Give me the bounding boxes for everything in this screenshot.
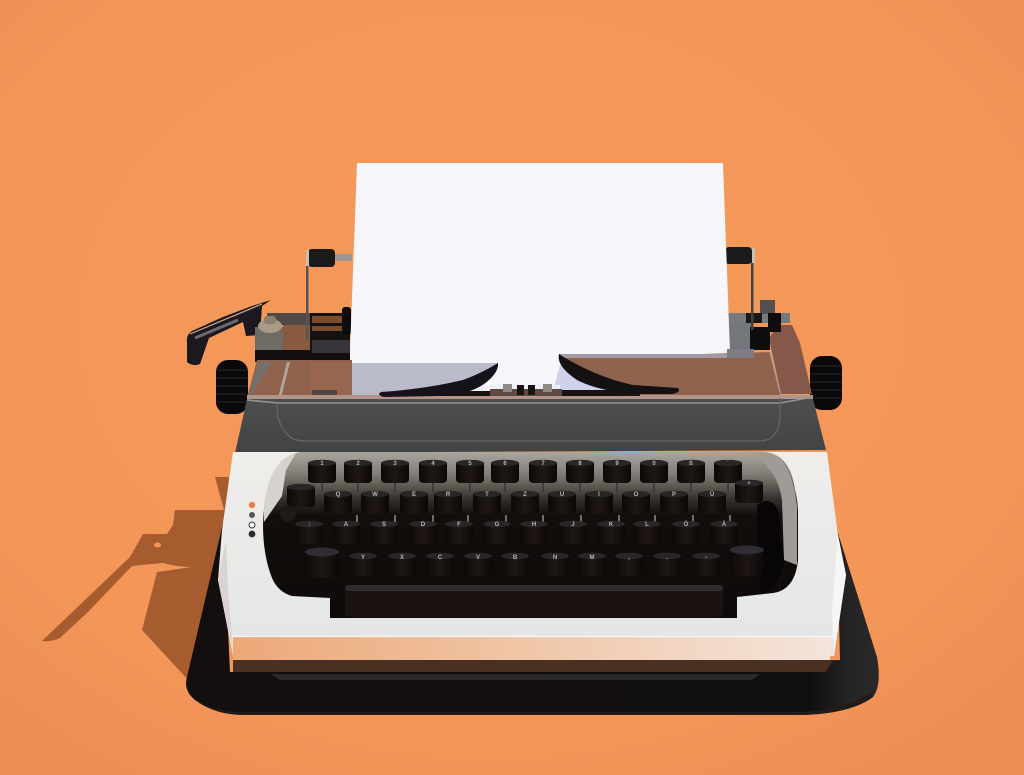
left bevel <box>218 540 233 650</box>
desk mat <box>186 523 879 715</box>
keyboard well <box>263 452 798 618</box>
keys row 3: Ö <box>684 521 689 528</box>
grey body band <box>235 397 826 453</box>
mat lower edge <box>195 692 873 715</box>
keys row 4: , <box>628 555 630 561</box>
right cover <box>492 352 781 396</box>
left paper bail arm <box>306 249 352 340</box>
keys row 2: P <box>672 492 676 498</box>
sheet of paper <box>350 163 730 392</box>
left paper guide crescent <box>379 363 498 397</box>
keys row 1: ´ <box>727 461 729 467</box>
keys row 4: . <box>666 555 668 561</box>
keys row 4: X <box>400 555 404 561</box>
keys row 4: V <box>476 555 480 561</box>
lower strip <box>247 395 813 399</box>
keys row 1: 7 <box>541 461 545 467</box>
keys row 1: 3 <box>393 461 397 467</box>
keys row 1: 5 <box>468 461 472 467</box>
top-row key stems <box>322 483 728 492</box>
keys row 3: S <box>382 522 386 528</box>
keys row 3: Ä <box>722 521 727 528</box>
key shadows on mat <box>270 674 760 680</box>
keys row 1: 9 <box>615 461 619 467</box>
grey reflection plate left <box>352 363 498 398</box>
lavender glimpse beneath paper <box>553 365 610 392</box>
right wall <box>752 453 797 565</box>
cast shadow of the typewriter <box>42 477 229 682</box>
keys row 2: E <box>412 492 416 498</box>
carriage mechanism right <box>728 300 800 351</box>
keys row 2: R <box>446 492 451 498</box>
right paper guide crescent <box>559 354 679 394</box>
keys row 2: Q <box>336 492 341 498</box>
keys row 2: T <box>485 492 489 498</box>
keys row 2: Z <box>523 492 527 498</box>
bottom dark strip <box>233 660 833 672</box>
keys row 2 <box>287 480 763 514</box>
keys row 3: ↓ <box>308 522 310 528</box>
keys row 1: 4 <box>431 461 435 467</box>
keys row 1: 1 <box>320 461 324 467</box>
keys row 4: - <box>705 555 707 561</box>
keys row 3: H <box>532 522 536 528</box>
keys row 1: 0 <box>652 461 656 467</box>
keys row 4: C <box>438 555 443 561</box>
left wall <box>264 453 296 522</box>
keys row 1: 2 <box>356 461 360 467</box>
keys row 3: J <box>571 522 575 528</box>
indicator dots <box>249 502 255 537</box>
white keyboard housing <box>218 452 846 672</box>
right platen knob <box>810 356 842 410</box>
keys row 2: O <box>634 492 639 498</box>
keys row 4: B <box>513 555 518 561</box>
keys row 3: G <box>495 522 500 528</box>
keys row 3 <box>280 506 738 544</box>
keys row 4: N <box>553 555 557 561</box>
keys row 3: K <box>609 522 614 528</box>
keys row 1: ß <box>689 461 693 467</box>
keys row 4 <box>305 546 764 578</box>
keys row 3: D <box>421 522 426 528</box>
keys row 4: M <box>590 555 594 561</box>
carriage mechanism left <box>255 307 352 362</box>
keys row 1: 8 <box>578 461 582 467</box>
keys row 2: W <box>372 492 378 498</box>
chrome stems <box>357 515 730 522</box>
keys row 2: + <box>747 481 751 487</box>
keys row 1 <box>308 460 742 483</box>
black mechanism right <box>757 501 784 592</box>
right paper bail arm <box>725 247 755 330</box>
left platen knob <box>216 360 248 414</box>
keys row 2: Ü <box>710 491 714 498</box>
typewriter <box>187 163 846 672</box>
keys row 3: F <box>457 522 461 528</box>
keys row 4: Y <box>361 555 365 561</box>
keys row 1: 6 <box>503 461 507 467</box>
keys row 3: L <box>645 522 649 528</box>
keys row 2: I <box>598 492 600 498</box>
top cover of the typewriter <box>247 343 813 399</box>
space bar <box>345 585 723 617</box>
carriage return lever <box>187 300 271 365</box>
front face reflecting orange <box>233 637 832 660</box>
platen mechanism <box>440 384 640 396</box>
keys row 2: U <box>560 492 564 498</box>
keys row 3: A <box>344 522 349 528</box>
right bevel <box>832 535 846 656</box>
